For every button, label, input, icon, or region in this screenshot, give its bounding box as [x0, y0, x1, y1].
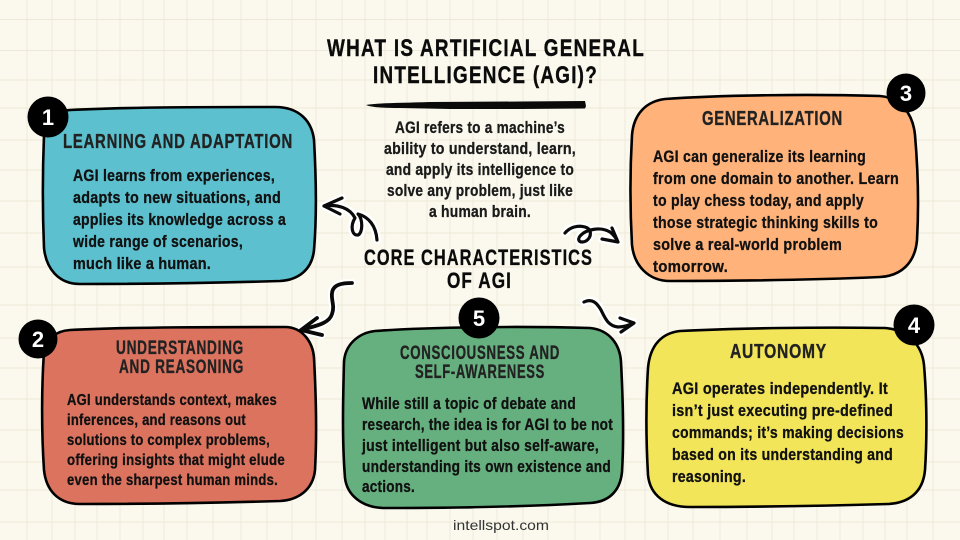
body text: learning and adaptation: adapts to new situations, and: [73, 188, 281, 207]
title: WHAT IS ARTIFICIAL GENERAL: [327, 35, 645, 62]
intro text block: and apply its intelligence to: [386, 160, 574, 179]
body text: understanding and reasoning: even the sharpest human minds.: [67, 472, 278, 489]
heading: consciousness and self-awareness: [400, 343, 560, 383]
body text: consciousness and self-awareness: understanding its own existence and: [362, 457, 611, 476]
body text: understanding and reasoning: offering insights that might elude: [67, 452, 285, 469]
body text: generalization: [653, 147, 899, 276]
subheading: core characteristics: CORE CHARACTERISTICS: [364, 245, 593, 270]
badge: 3: 3: [900, 81, 912, 106]
body text: autonomy: isn’t just executing pre-defined: [672, 401, 893, 420]
badge: 3: [886, 74, 926, 112]
badge: 4: 4: [908, 313, 921, 338]
intro text block: [384, 118, 576, 221]
body text: generalization: solve a real-world problem: [653, 235, 842, 254]
heading: generalization: GENERALIZATION: [702, 108, 843, 130]
body text: understanding and reasoning: solutions to complex problems,: [67, 432, 270, 449]
panel: consciousness and self-awareness: [343, 298, 623, 508]
arrow: to card 4: [584, 301, 634, 332]
body text: understanding and reasoning: [67, 392, 285, 489]
body text: autonomy: based on its understanding and: [672, 445, 893, 464]
heading: autonomy: AUTONOMY: [730, 341, 827, 363]
body text: consciousness and self-awareness: While still a topic of debate and: [362, 394, 576, 413]
brush underline: [366, 101, 586, 109]
panel: generalization: [630, 74, 926, 281]
body text: generalization: to play chess today, and apply: [653, 191, 864, 210]
heading: consciousness and self-awareness: SELF-AWARENESS: [415, 362, 545, 383]
body text: learning and adaptation: much like a human.: [73, 254, 211, 273]
arrow: to card 2: [301, 283, 352, 335]
title: INTELLIGENCE (AGI)?: [373, 62, 598, 89]
body text: generalization: AGI can generalize its learning: [653, 147, 866, 166]
body text: autonomy: commands; it’s making decisions: [672, 423, 904, 442]
badge: 2: [18, 320, 58, 358]
body text: understanding and reasoning: AGI understands context, makes: [67, 392, 277, 409]
heading: understanding and reasoning: UNDERSTANDING: [116, 338, 244, 359]
panel: understanding and reasoning: [18, 320, 316, 504]
badge: 4: [894, 304, 934, 346]
arrow: to card 3: [565, 226, 618, 242]
body text: consciousness and self-awareness: actions.: [362, 477, 415, 496]
title: [327, 35, 645, 89]
heading: understanding and reasoning: [116, 338, 244, 378]
body text: learning and adaptation: [72, 166, 286, 273]
body text: generalization: tomorrow.: [653, 257, 728, 276]
subheading: core characteristics: [364, 245, 593, 293]
badge: 1: 1: [42, 105, 54, 130]
body text: autonomy: AGI operates independently. It: [672, 379, 888, 398]
heading: understanding and reasoning: AND REASONING: [119, 357, 244, 378]
body text: generalization: those strategic thinking skills to: [653, 213, 878, 232]
footer: source: intellspot.com: [453, 517, 549, 533]
arrow: to card 1: [324, 198, 377, 240]
body text: autonomy: [672, 379, 904, 486]
body text: consciousness and self-awareness: just intelligent but also self-aware,: [361, 436, 599, 455]
panel: autonomy: [646, 304, 934, 507]
panel: learning and adaptation: [28, 96, 316, 284]
body text: learning and adaptation: AGI learns from experiences,: [73, 166, 275, 185]
badge: 1: [28, 96, 68, 138]
badge: 2: 2: [32, 327, 44, 352]
body text: understanding and reasoning: inferences, and reasons out: [67, 412, 246, 429]
badge: 5: 5: [473, 306, 485, 331]
heading: learning and adaptation: LEARNING AND ADAPTATION: [63, 131, 293, 153]
intro text block: AGI refers to a machine’s: [395, 118, 565, 137]
body text: consciousness and self-awareness: research, the idea is for AGI to be not: [362, 415, 613, 434]
body text: autonomy: reasoning.: [672, 467, 746, 486]
subheading: core characteristics: OF AGI: [447, 268, 512, 293]
body text: generalization: from one domain to another. Learn: [653, 169, 899, 188]
body text: consciousness and self-awareness: [361, 394, 613, 496]
heading: consciousness and self-awareness: CONSCIOUSNESS AND: [400, 343, 560, 364]
body text: learning and adaptation: applies its knowledge across a: [73, 210, 286, 229]
badge: 5: [458, 298, 500, 338]
body text: learning and adaptation: wide range of scenarios,: [72, 232, 243, 251]
intro text block: ability to understand, learn,: [384, 139, 576, 158]
intro text block: a human brain.: [429, 202, 531, 221]
intro text block: solve any problem, just like: [387, 181, 573, 200]
